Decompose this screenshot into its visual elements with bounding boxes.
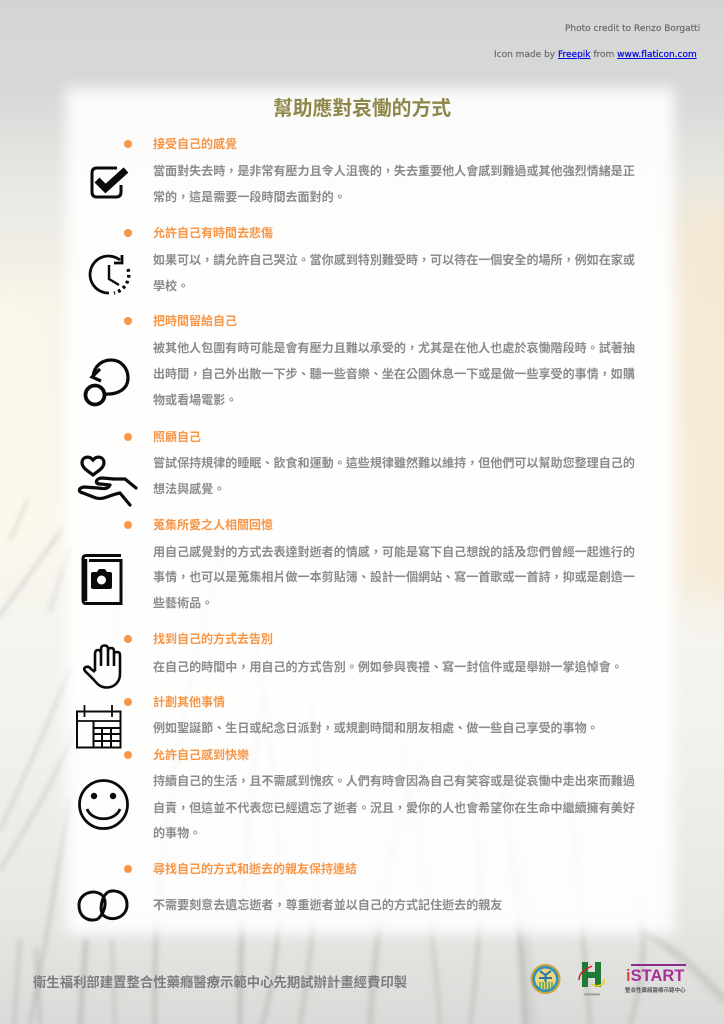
body text: 被其他人包圍有時可能是會有壓力且難以承受的，尤其是在他人也處於哀慟階段時。試著抽	[153, 341, 635, 355]
body text	[153, 341, 635, 407]
icon: heart in hand	[78, 456, 138, 507]
panel: allow yourself to be happy	[78, 748, 635, 840]
body text: 用自己感覺對的方式去表達對逝者的情感，可能是寫下自己想說的話及您們曾經一起進行的	[153, 545, 635, 559]
body text: 自責，但這並不代表您已經遺忘了逝者。況且，愛你的人也會希望你在生命中繼續擁有美好	[153, 801, 635, 815]
heading: 允許自己感到快樂	[153, 748, 249, 762]
icon: loop	[84, 358, 130, 406]
icon: calendar	[76, 705, 122, 748]
body text: 物或看場電影。	[153, 393, 237, 407]
panel: leave time for yourself	[84, 314, 635, 407]
translucent white panel	[66, 88, 674, 934]
bullet	[124, 433, 132, 441]
logo subtitle: 整合性藥癮醫療示範中心	[625, 988, 686, 994]
title: 幫助應對哀慟的方式	[273, 98, 451, 120]
body text: 事情，也可以是蒐集相片做一本剪貼簿、設計一個網站、寫一首歌或一首詩，抑或是創造一	[153, 570, 635, 584]
panel: say goodbye	[82, 632, 623, 689]
bullet	[124, 635, 132, 643]
heading: 把時間留給自己	[153, 314, 237, 328]
photo credit: Photo credit to Renzo Borgatti	[565, 24, 700, 34]
body text: 出時間，自己外出散一下步、聽一些音樂、坐在公園休息一下或是做一些享受的事情，如購	[153, 367, 635, 381]
body text	[153, 545, 635, 610]
heading: 尋找自己的方式和逝去的親友保持連結	[153, 862, 357, 876]
bullet	[124, 751, 132, 759]
body text: 在自己的時間中，用自己的方式告別。例如參與喪禮、寫一封信件或是舉辦一掌追悼會。	[153, 660, 623, 674]
panel: allow time to grieve	[88, 226, 635, 295]
body text: 想法與感覺。	[153, 482, 225, 496]
icon: check box	[90, 166, 128, 198]
heading: 蒐集所愛之人相關回憶	[153, 518, 273, 532]
body text: 嘗試保持規律的睡眠、飲食和運動。這些規律雖然難以維持，但他們可以幫助您整理自己的	[153, 456, 635, 470]
body text: 當面對失去時，是非常有壓力且令人沮喪的，失去重要他人會感到難過或其他強烈情緒是正	[153, 164, 635, 178]
logo: iSTART	[625, 964, 686, 994]
body text	[153, 253, 635, 293]
body text: 不需要刻意去遺忘逝者，尊重逝者並以自己的方式記住逝去的親友	[153, 898, 502, 912]
logo bar	[631, 964, 686, 966]
icon: smiley	[78, 779, 129, 830]
bullet	[124, 140, 132, 148]
heading: 接受自己的感覺	[153, 137, 237, 151]
body text: 常的，這是需要一段時間去面對的。	[153, 190, 346, 204]
heading: 找到自己的方式去告別	[153, 632, 273, 646]
logo: ministry emblem	[530, 964, 560, 994]
body text	[153, 456, 635, 496]
body text: 的事物。	[153, 826, 201, 840]
bullet	[124, 229, 132, 237]
heading: 照顧自己	[153, 430, 201, 444]
icon: photo album	[82, 554, 122, 605]
body text: 如果可以，請允許自己哭泣。當你感到特別難受時，可以待在一個安全的場所，例如在家或	[153, 253, 635, 267]
body text	[153, 774, 635, 840]
logo wordmark: iSTART	[626, 967, 684, 985]
heading: 允許自己有時間去悲傷	[153, 226, 273, 240]
footer funding statement: 衛生福利部建置整合性藥癮醫療示範中心先期試辦計畫經費印製	[33, 975, 407, 990]
icon credit: Icon made by Freepik from www.flaticon.com	[494, 50, 697, 60]
body text	[153, 164, 635, 204]
icon: linked rings	[78, 889, 128, 922]
icon: clock	[88, 254, 130, 295]
bullet	[124, 317, 132, 325]
bullet	[124, 521, 132, 529]
logo: H	[578, 962, 605, 996]
body text: 學校。	[153, 279, 189, 293]
body text: 持續自己的生活，且不需感到愧疚。人們有時會因為自己有笑容或是從哀慟中走出來而難過	[153, 774, 635, 788]
heading: 計劃其他事情	[153, 695, 225, 709]
body text: 例如聖誕節、生日或紀念日派對，或規劃時間和朋友相處、做一些自己享受的事物。	[153, 721, 599, 735]
panel: accept your feelings	[90, 137, 635, 204]
body text: 些藝術品。	[153, 596, 213, 610]
panel: take care of yourself	[78, 430, 635, 507]
icon: raised hand	[82, 644, 122, 689]
panel: plan other things	[76, 695, 599, 748]
panel: collect memories	[82, 518, 635, 610]
bullet	[124, 865, 132, 873]
panel: maintain the connection	[78, 862, 502, 922]
bullet	[124, 698, 132, 706]
